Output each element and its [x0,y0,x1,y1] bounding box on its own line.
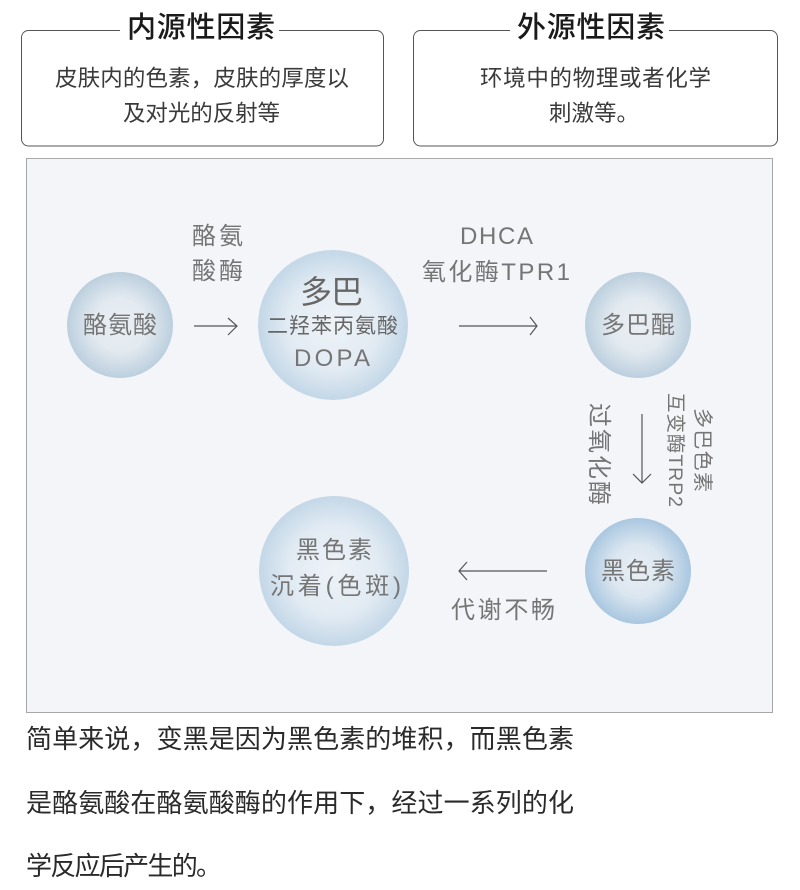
panel: endogenous factors [22,11,384,146]
arrow: melanin to deposition [459,562,547,580]
label: peroxidase (rotated): 过氧化酶 [585,403,612,505]
label: tyrosinase: 酪氨 [192,223,243,250]
label: TRP2 (rotated): 互变酶TRP2 [664,393,686,507]
text: summary paragraph: 学反应后产生的。 [26,851,222,881]
label: DHCA oxidase TPR1: DHCA [460,223,533,250]
node: melanin deposition: 黑色素 [296,537,372,564]
text: exogenous description: 刺激等。 [549,101,639,126]
node: tyrosine [67,272,173,378]
node: DOPA: DOPA [294,345,370,372]
node: DOPA: 二羟苯丙氨酸 [267,315,398,338]
text: endogenous description [55,66,349,126]
text: exogenous description: 环境中的物理或者化学 [480,66,711,91]
arrow: tyrosine to DOPA [194,318,237,335]
text: summary paragraph [26,724,574,881]
node: melanin deposition [259,496,409,646]
arrow: DOPA to dopaquinone [459,317,537,335]
text: endogenous description: 皮肤内的色素，皮肤的厚度以 [55,66,349,91]
label: tyrosinase [192,223,243,285]
heading: endogenous factors: 内源性因素 [127,11,275,44]
node: melanin: 黑色素 [601,558,675,585]
heading: exogenous factors: 外源性因素 [517,11,665,44]
arrow: dopaquinone to melanin [633,414,651,483]
label: poor metabolism: 代谢不畅 [451,597,555,624]
node: melanin [585,518,691,624]
text: summary paragraph: 是酪氨酸在酪氨酸酶的作用下，经过一系列的化 [26,788,574,818]
panel: melanin pathway diagram [26,158,772,712]
text: summary paragraph: 简单来说，变黑是因为黑色素的堆积，而黑色素 [26,724,574,754]
node: dopaquinone: 多巴醌 [601,312,675,339]
label: tyrosinase: 酸酶 [192,258,243,285]
panel: exogenous factors [414,11,778,146]
node: dopaquinone [585,272,691,378]
label: dopachrome (rotated): 多巴色素 [691,408,714,492]
label: DHCA oxidase TPR1 [422,223,570,286]
node: melanin deposition: 沉着(色斑) [270,573,401,600]
text: exogenous description [480,66,711,126]
label: DHCA oxidase TPR1: 氧化酶TPR1 [422,259,570,286]
node: tyrosine: 酪氨酸 [83,312,157,339]
node: DOPA [258,250,408,400]
text: endogenous description: 及对光的反射等 [123,101,280,126]
node: DOPA: 多巴 [300,274,363,310]
